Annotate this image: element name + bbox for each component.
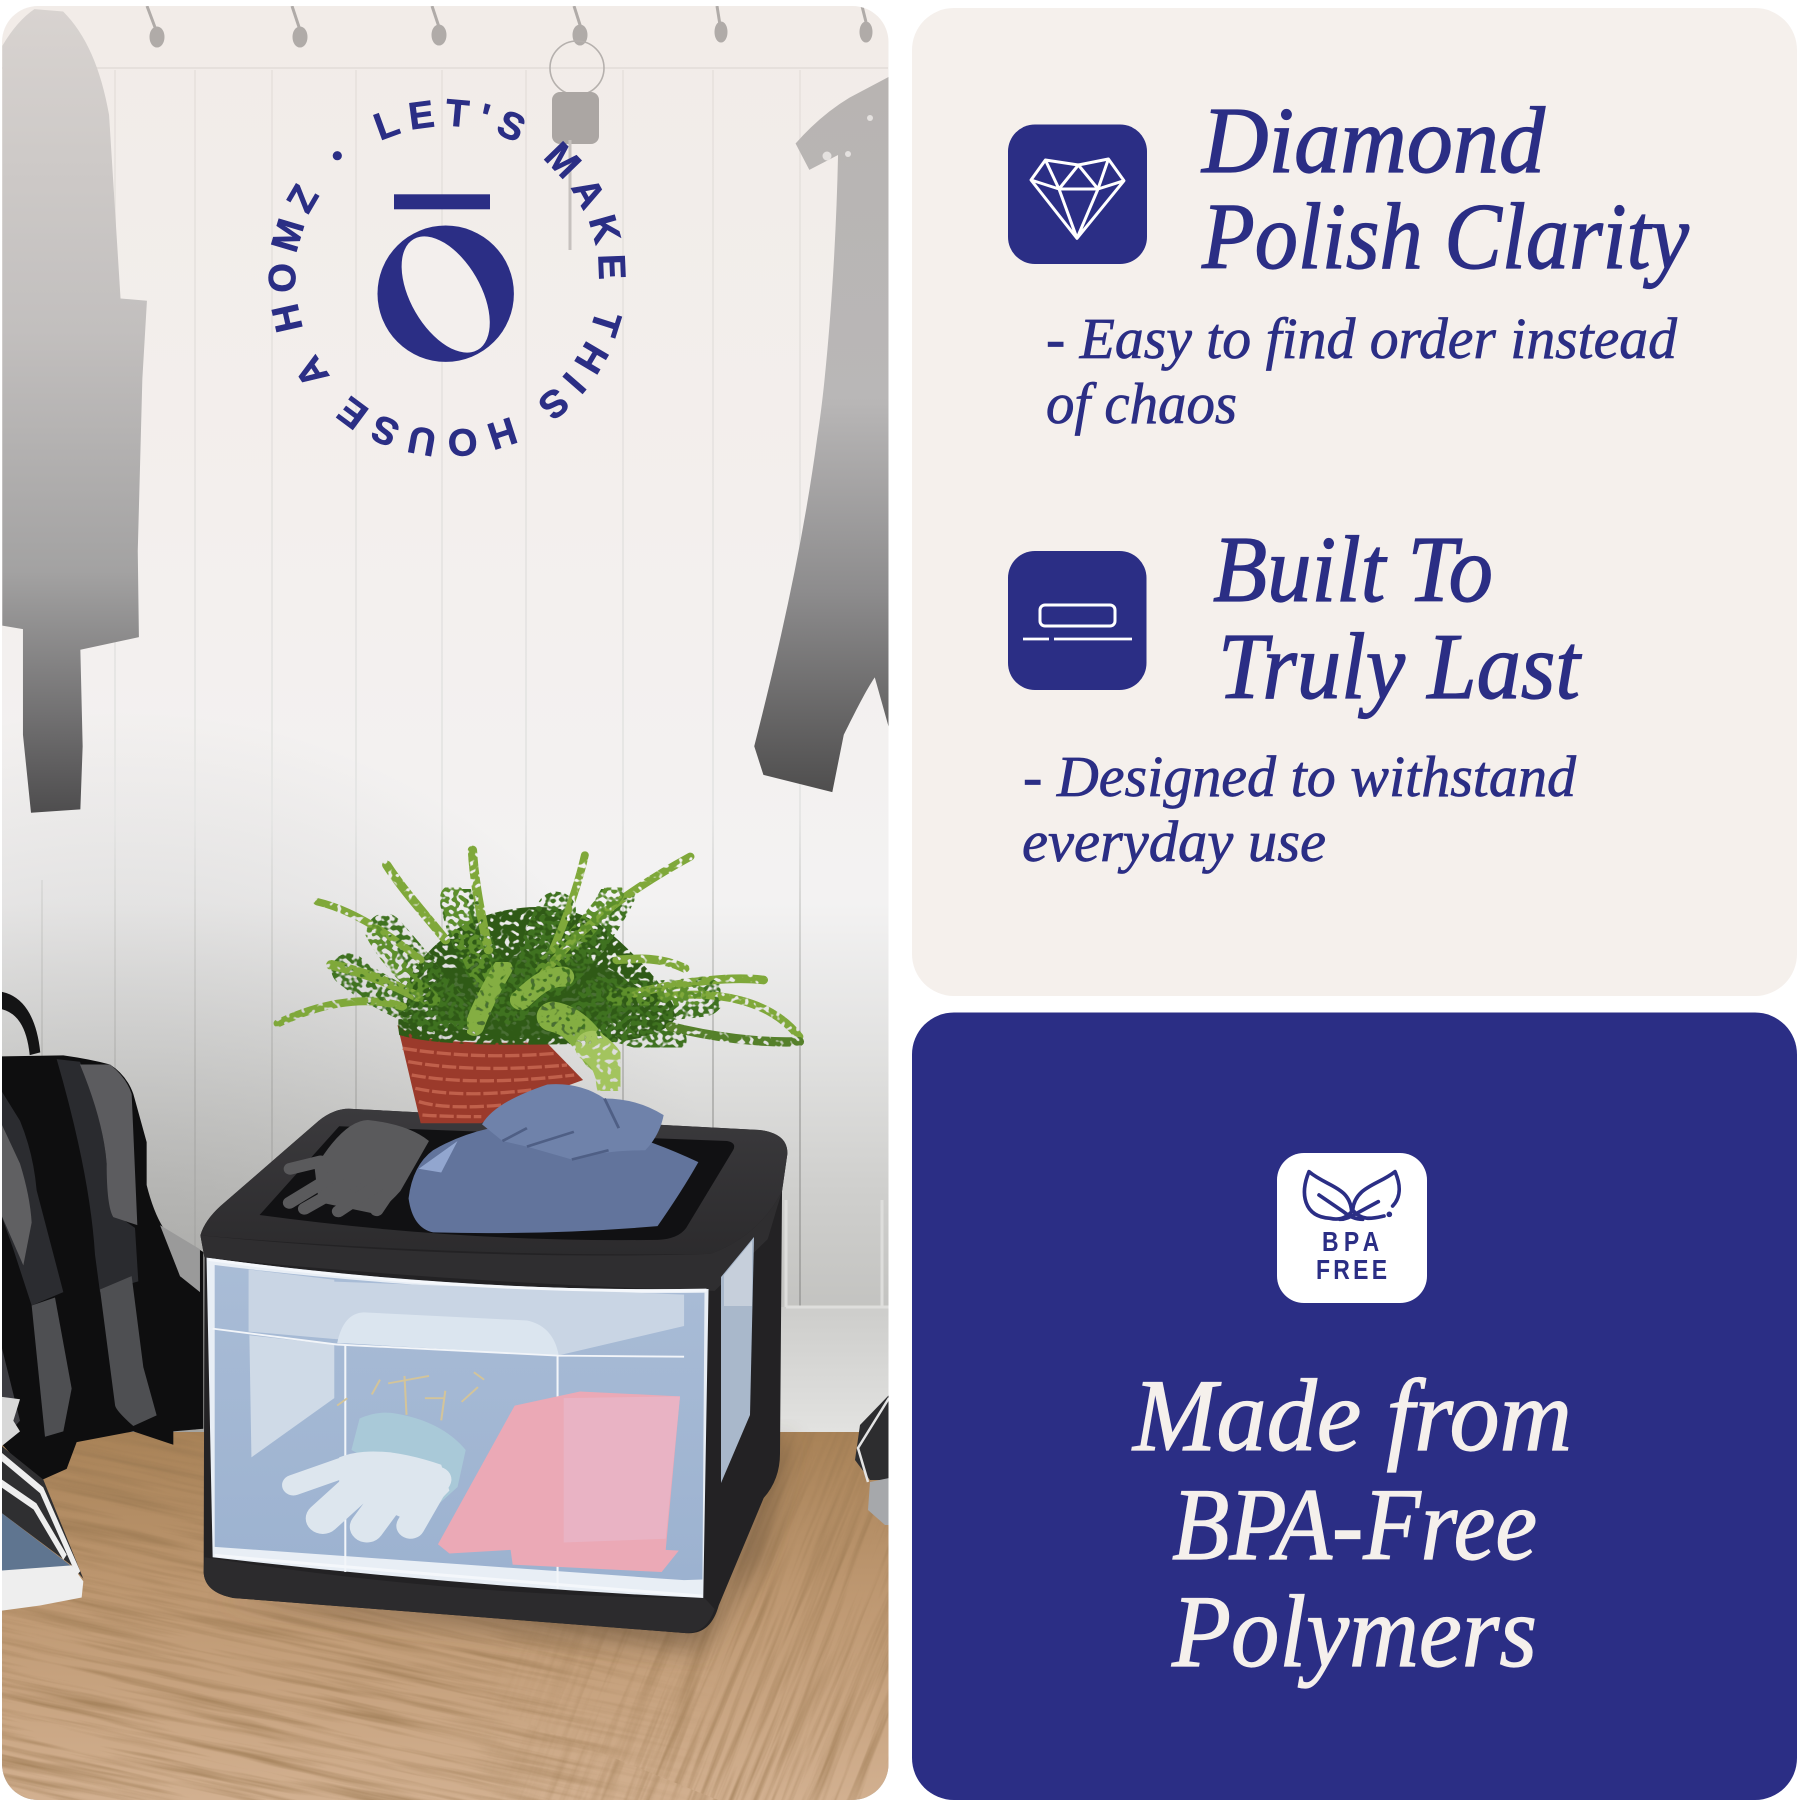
- fern light tufts: [474, 968, 613, 1085]
- backpack: [0, 1000, 203, 1482]
- icon: BPA free leaves: BPA: [1322, 1227, 1385, 1258]
- cloth folds: [502, 1098, 619, 1160]
- terracotta woven pot: [397, 1025, 583, 1123]
- jacket collar eyelets: [822, 115, 873, 160]
- left sneaker: [0, 1340, 83, 1611]
- fern dark centre: [398, 907, 678, 1045]
- body text: durability: [1022, 744, 1577, 874]
- panel: BPA-free card: [912, 1012, 1797, 1800]
- wall panel edge: [786, 1200, 889, 1307]
- body text: order: [1046, 306, 1678, 436]
- heading: Made from BPA-Free Polymers: Made from: [1131, 1359, 1572, 1473]
- fern mid fronds: [374, 893, 696, 1000]
- front frame highlights: [209, 1259, 707, 1596]
- drawer unit top surface: [200, 1109, 787, 1254]
- pink cloth: [438, 1392, 680, 1572]
- light glove: [293, 1413, 466, 1527]
- fern core: [428, 955, 635, 1038]
- icon: BPA free leaves: [1277, 1153, 1427, 1303]
- panel: features card: [912, 8, 1797, 996]
- feature 2: [1008, 518, 1582, 874]
- panel: product photo: [2, 6, 888, 1800]
- storage drawer unit: [200, 1109, 787, 1633]
- feature 1: [1008, 89, 1689, 436]
- heading: Diamond Polish Clarity: [1200, 89, 1689, 289]
- clear drawer front: [207, 1258, 709, 1598]
- drawer unit front rim: [200, 1191, 782, 1291]
- floor: [0, 1432, 890, 1800]
- body text: durability: everyday use: [1022, 809, 1326, 874]
- grey glove: [289, 1120, 429, 1213]
- left hanging jacket: [2, 9, 147, 813]
- blue cloth top pile: [482, 1084, 664, 1160]
- drawer lines: [213, 1329, 684, 1589]
- drawer unit body: [200, 1109, 787, 1633]
- fern dark speckle: [349, 897, 703, 1040]
- blue folded cloth: [409, 1128, 698, 1233]
- icon: diamond: [1008, 124, 1147, 264]
- body text: order: of chaos: [1046, 371, 1237, 436]
- box floor shadow: [215, 1440, 790, 1650]
- right sneaker: [855, 1395, 889, 1525]
- icon: BPA free leaves: FREE: [1316, 1255, 1390, 1286]
- icon: flat lid: [1008, 551, 1146, 690]
- logo: macron bar: [394, 194, 490, 209]
- drawer bottom rim: [204, 1557, 715, 1633]
- drawer interior: [215, 1265, 704, 1580]
- heading: Built To Truly Last: [1213, 518, 1582, 719]
- fern outer fronds: [278, 850, 799, 1042]
- heading: Made from BPA-Free Polymers: [1131, 1359, 1572, 1689]
- icon: coat hooks: [147, 6, 871, 46]
- heading: Made from BPA-Free Polymers: Polymers: [1171, 1575, 1537, 1689]
- heading: Diamond Polish Clarity: Polish Clarity: [1201, 185, 1689, 289]
- icon: hanging keys: [550, 41, 604, 250]
- side window: [721, 1237, 754, 1483]
- logo badge: [268, 98, 626, 456]
- pins: [337, 1372, 484, 1420]
- baseboard: [780, 1307, 889, 1432]
- heading: Built To Truly Last: Built To: [1213, 518, 1493, 622]
- heading: Made from BPA-Free Polymers: BPA-Free: [1172, 1468, 1537, 1582]
- wall corner shading: [2, 814, 528, 1432]
- fern plant: [278, 850, 799, 1085]
- drawer unit top tray: [260, 1126, 734, 1240]
- drawer handle: [337, 1312, 559, 1356]
- heading: Built To Truly Last: Truly Last: [1218, 615, 1582, 719]
- body text: order: - Easy to find order instead: [1046, 306, 1678, 371]
- interior light panels: [249, 1269, 684, 1356]
- logo: tilted ring letter o: [378, 222, 514, 367]
- top folded items: [289, 1084, 698, 1233]
- body text: durability: - Designed to withstand: [1023, 744, 1577, 809]
- logo: circular slogan: LET'S MAKE THIS HOUSE A HOMZ: [268, 98, 626, 456]
- heading: Diamond Polish Clarity: Diamond: [1200, 89, 1546, 193]
- logo: separator dot: [333, 151, 342, 160]
- wall panelling and coat rail: [2, 68, 888, 1430]
- right hanging jacket: [754, 76, 891, 792]
